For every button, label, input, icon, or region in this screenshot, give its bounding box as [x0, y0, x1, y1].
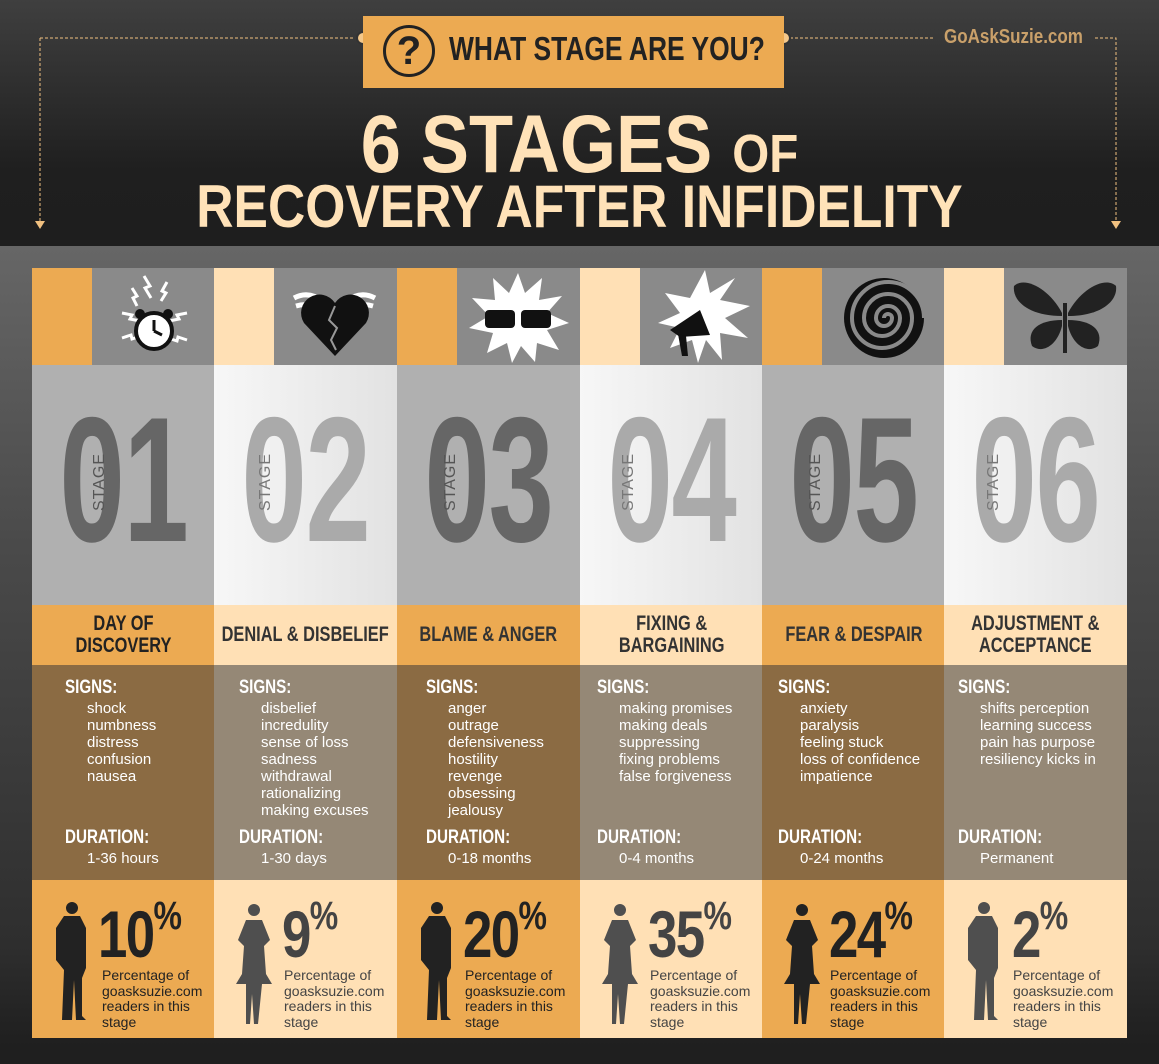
stage title [32, 605, 215, 665]
number 06: 06 [971, 380, 1100, 579]
signs and duration: shock [87, 700, 126, 717]
signs and duration: learning success [980, 717, 1092, 734]
icon: question mark [383, 25, 435, 77]
stat 9% [214, 880, 397, 1038]
signs and duration: paralysis [800, 717, 859, 734]
signs and duration: making promises [619, 700, 732, 717]
stat 24% [762, 880, 945, 1038]
signs and duration: shifts perception [980, 700, 1089, 717]
stat 24%: 24% [829, 894, 911, 971]
stat 35%: goasksuzie.com [650, 982, 750, 998]
number 05: STAGE [807, 453, 824, 511]
number 01: STAGE [91, 453, 108, 511]
stat 20% [397, 880, 580, 1038]
signs and duration [397, 665, 580, 880]
stat 9%: stage [284, 1014, 318, 1030]
stage title [762, 605, 945, 665]
panel: stage 04 [580, 268, 762, 1038]
stage title: ACCEPTANCE [979, 634, 1092, 657]
stage title: BLAME & ANGER [420, 623, 557, 646]
signs and duration: suppressing [619, 734, 700, 751]
stat 35% [580, 880, 763, 1038]
stat 35%: 35% [648, 894, 730, 971]
panel: stage 06 [944, 268, 1127, 1038]
signs and duration: anger [448, 700, 486, 717]
stat 9%: readers in this [284, 998, 372, 1014]
signs and duration [32, 665, 215, 880]
icon: alarm clock [92, 268, 215, 365]
stat 20%: readers in this [465, 998, 553, 1014]
signs and duration: rationalizing [261, 785, 341, 802]
stat 10%: goasksuzie.com [102, 982, 202, 998]
signs and duration: 0-24 months [800, 850, 883, 867]
signs and duration: numbness [87, 717, 156, 734]
stat 35%: Percentage of [650, 967, 737, 983]
signs and duration: obsessing [448, 785, 516, 802]
signs and duration: Permanent [980, 850, 1053, 867]
signs and duration: DURATION: [426, 827, 510, 848]
badge: what stage are you: WHAT STAGE ARE YOU? [449, 30, 765, 67]
signs and duration: 0-18 months [448, 850, 531, 867]
signs and duration: jealousy [448, 802, 503, 819]
number 06 [944, 365, 1127, 605]
stat 24%: goasksuzie.com [830, 982, 930, 998]
stage title [944, 605, 1127, 665]
number 02: 02 [241, 380, 370, 579]
badge: what stage are you [363, 16, 784, 88]
icon: megaphone [640, 268, 763, 365]
signs and duration [762, 665, 945, 880]
stage title: FEAR & DESPAIR [785, 623, 922, 646]
stat 35%: readers in this [650, 998, 738, 1014]
icon: broken winged heart [274, 268, 397, 365]
signs and duration: DURATION: [597, 827, 681, 848]
number 03: STAGE [442, 453, 459, 511]
signs and duration: sense of loss [261, 734, 349, 751]
panel: stage 01 [32, 268, 214, 1038]
signs and duration: SIGNS: [65, 677, 117, 698]
site name: GoAskSuzie.com [944, 26, 1083, 48]
signs and duration: pain has purpose [980, 734, 1095, 751]
stat 10%: stage [102, 1014, 136, 1030]
stat 20%: stage [465, 1014, 499, 1030]
stat 2%: 2% [1012, 894, 1067, 971]
stat 9%: Percentage of [284, 967, 371, 983]
stage title [397, 605, 580, 665]
stat 35%: stage [650, 1014, 684, 1030]
signs and duration: feeling stuck [800, 734, 883, 751]
signs and duration: SIGNS: [778, 677, 830, 698]
stat 24%: readers in this [830, 998, 918, 1014]
number 02 [214, 365, 397, 605]
number 04 [580, 365, 763, 605]
signs and duration: DURATION: [239, 827, 323, 848]
signs and duration: SIGNS: [426, 677, 478, 698]
stat 2%: goasksuzie.com [1013, 982, 1113, 998]
icon: fists starburst [457, 268, 580, 365]
signs and duration: SIGNS: [239, 677, 291, 698]
signs and duration [580, 665, 763, 880]
signs and duration: fixing problems [619, 751, 720, 768]
signs and duration: defensiveness [448, 734, 544, 751]
title [196, 99, 963, 240]
stat 2% [944, 880, 1127, 1038]
stage title [580, 605, 763, 665]
title: 6 STAGES OF [361, 99, 798, 190]
number 02: STAGE [257, 453, 274, 511]
stat 20%: goasksuzie.com [465, 982, 565, 998]
number 01: 01 [59, 380, 188, 579]
icon: hypnotic spiral [822, 268, 945, 365]
signs and duration: making excuses [261, 802, 369, 819]
stat 2%: Percentage of [1013, 967, 1100, 983]
signs and duration: sadness [261, 751, 317, 768]
signs and duration: impatience [800, 768, 873, 785]
signs and duration: incredulity [261, 717, 329, 734]
stage title: DISCOVERY [76, 634, 171, 657]
signs and duration: making deals [619, 717, 707, 734]
signs and duration: confusion [87, 751, 151, 768]
stage title: ADJUSTMENT & [971, 612, 1100, 635]
stat 2%: stage [1013, 1014, 1047, 1030]
signs and duration: resiliency kicks in [980, 751, 1096, 768]
number 03: 03 [424, 380, 553, 579]
stage title: DAY OF [93, 612, 154, 635]
number 05 [762, 365, 945, 605]
number 05: 05 [789, 380, 918, 579]
signs and duration [944, 665, 1127, 880]
number 01 [32, 365, 215, 605]
signs and duration: anxiety [800, 700, 848, 717]
title: RECOVERY AFTER INFIDELITY [196, 173, 963, 240]
stat 10%: 10% [98, 894, 180, 971]
stage title: BARGAINING [619, 634, 724, 657]
stat 20%: 20% [463, 894, 545, 971]
signs and duration: hostility [448, 751, 498, 768]
signs and duration: SIGNS: [958, 677, 1010, 698]
signs and duration: DURATION: [958, 827, 1042, 848]
stage title: DENIAL & DISBELIEF [222, 623, 389, 646]
number 03 [397, 365, 580, 605]
number 04: STAGE [620, 453, 637, 511]
stage title: FIXING & [636, 612, 707, 635]
signs and duration: revenge [448, 768, 502, 785]
icon: question mark: ? [397, 29, 421, 73]
signs and duration: loss of confidence [800, 751, 920, 768]
panel: stage 05 [762, 268, 944, 1038]
stat 20%: Percentage of [465, 967, 552, 983]
stat 2%: readers in this [1013, 998, 1101, 1014]
signs and duration: DURATION: [778, 827, 862, 848]
panel: stage 02 [214, 268, 397, 1038]
stat 10% [32, 880, 215, 1038]
signs and duration: SIGNS: [597, 677, 649, 698]
stat 10%: Percentage of [102, 967, 189, 983]
header dashed connector [35, 33, 1121, 229]
stat 24%: stage [830, 1014, 864, 1030]
signs and duration: 0-4 months [619, 850, 694, 867]
signs and duration: DURATION: [65, 827, 149, 848]
number 06: STAGE [985, 453, 1002, 511]
signs and duration: 1-36 hours [87, 850, 159, 867]
signs and duration: 1-30 days [261, 850, 327, 867]
stat 10%: readers in this [102, 998, 190, 1014]
icon: butterfly [1004, 268, 1127, 365]
stat 24%: Percentage of [830, 967, 917, 983]
number 04: 04 [607, 380, 736, 579]
panel: stage 03 [397, 268, 580, 1038]
signs and duration: distress [87, 734, 139, 751]
signs and duration: outrage [448, 717, 499, 734]
stat 9%: goasksuzie.com [284, 982, 384, 998]
stage title [214, 605, 397, 665]
signs and duration [214, 665, 397, 880]
signs and duration: withdrawal [261, 768, 332, 785]
signs and duration: disbelief [261, 700, 316, 717]
stat 9%: 9% [282, 894, 337, 971]
signs and duration: false forgiveness [619, 768, 732, 785]
signs and duration: nausea [87, 768, 136, 785]
